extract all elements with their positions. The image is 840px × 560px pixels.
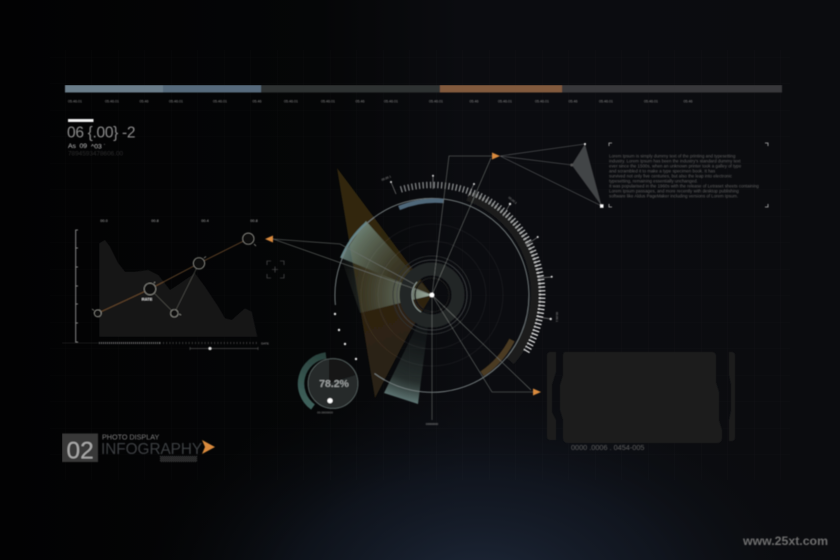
timeline labels: 05.46.01 (284, 100, 298, 104)
arrow: left (265, 236, 273, 242)
secondary line (150, 263, 199, 313)
panel copy: industry. Lorem Ipsum has been the industry's standard dummy text (609, 158, 741, 164)
teal arc upper left (341, 223, 366, 258)
timeline labels: 05.46 (356, 100, 364, 104)
column labels: 00.0 (100, 219, 108, 223)
triangle points (570, 143, 604, 208)
timeline labels: 05.46.01 (644, 100, 658, 104)
photo code: 0000 .0006 . 0454-005 (571, 443, 644, 452)
satellite dots (334, 313, 357, 360)
node label: RATE (142, 296, 153, 302)
gauge dot (327, 398, 333, 403)
green wedge upper (341, 221, 432, 295)
photo main (560, 352, 722, 443)
core rings (393, 256, 471, 334)
panel copy: Lorem Ipsum passages, and more recently with desktop publishing (609, 188, 739, 194)
readout block: As (68, 143, 77, 150)
chart axis (76, 230, 78, 342)
panel copy: software like Aldus PageMaker including versions of Lorem Ipsum. (609, 194, 738, 198)
panel copy: typesetting, remaining essentially unchanged. (609, 178, 698, 184)
connector lines (273, 156, 533, 420)
marker labels: 00.00.1 (381, 174, 392, 182)
photo right bracket (729, 352, 735, 441)
timeline labels: 05.46 (568, 100, 578, 104)
triangle fill (572, 144, 602, 206)
timeline bar (65, 85, 782, 92)
gauge disc (308, 359, 358, 408)
column labels (100, 219, 258, 223)
title block (62, 432, 215, 464)
gauge (301, 356, 358, 414)
gauge caption: 00.0000000 (317, 410, 333, 414)
crosshair box (267, 261, 284, 278)
photo left bracket (547, 352, 556, 440)
timeline labels: 05.46.01 (321, 100, 335, 104)
timeline labels: 05.46.01 (68, 100, 82, 104)
timeline labels: 05.46.01 (429, 100, 443, 104)
panel copy: and scrambled it to make a type specimen book. It has (609, 168, 716, 174)
faint rings (361, 224, 503, 366)
radar (273, 156, 559, 426)
readout block: 06 {.00} -2 (67, 124, 135, 142)
timeline labels: 05.46.01 (213, 100, 227, 104)
green wedge lower (384, 295, 432, 404)
center point (430, 292, 434, 298)
timeline labels: 05.46 (140, 100, 148, 104)
brown arc lower right (482, 340, 512, 374)
gauge ring (308, 358, 358, 408)
trend line (98, 239, 248, 313)
timeline labels: 05.46.01 (384, 100, 398, 104)
readout block (67, 119, 135, 158)
marker labels: 00.00.1 (507, 196, 518, 205)
timeline labels: 05.46.01 (599, 100, 613, 104)
area series (99, 240, 257, 337)
dither strip (160, 456, 197, 462)
panel copy: Lorem Ipsum is simply dummy text of the printing and typesetting (609, 154, 736, 158)
arrow: upper right (492, 152, 500, 160)
timeline labels: 05.46.01 (535, 100, 549, 104)
marker labels: 00000000 (426, 422, 439, 426)
number box (62, 434, 98, 462)
line chart panel (62, 219, 269, 350)
data nodes (92, 233, 256, 317)
triangle node (500, 143, 604, 208)
timeline labels: 05.46.01 (169, 100, 183, 104)
title arrow (202, 440, 215, 454)
green wedge left (341, 258, 432, 313)
subtitle: PHOTO DISPLAY (102, 432, 159, 442)
column labels: 00.8 (250, 219, 258, 223)
panel corners (609, 143, 768, 207)
brown sector (337, 168, 432, 398)
panel copy (609, 154, 759, 198)
watermark: www.25xt.com (742, 534, 828, 548)
panel copy: It was popularised in the 1960s with the release of Letraset sheets containing (609, 184, 759, 188)
readout block: ^03 ˙ (91, 142, 106, 150)
photo display frame (547, 352, 735, 443)
gauge value: 78.2% (319, 378, 350, 390)
marker labels (381, 174, 559, 426)
slider (190, 347, 258, 350)
timeline labels: 05.46 (684, 100, 692, 104)
timeline labels: 05.46 (470, 100, 478, 104)
gauge teal arc (301, 356, 326, 407)
readout block: 09 (80, 143, 87, 150)
panel copy: ever since the 1500s, when an unknown printer took a galley of type (609, 164, 742, 168)
gauge dark sector (329, 359, 356, 384)
main ring (335, 198, 529, 392)
timeline labels: 05.46.01 (498, 100, 512, 104)
title: INFOGRAPHY (101, 441, 202, 458)
radial markers (390, 175, 553, 320)
column labels: 00.4 (201, 219, 209, 223)
panel copy: survived not only five centuries, but also the leap into electronic (609, 174, 733, 178)
readout block: 7894593478606.00 (68, 150, 124, 158)
number: 02 (66, 438, 94, 464)
tick ring (401, 185, 542, 352)
timeline labels: 05.46 (252, 100, 262, 104)
dark outer band (468, 196, 536, 361)
triangle connector lines (500, 144, 602, 206)
arrow: lower right (533, 388, 541, 396)
blue arc (399, 201, 444, 208)
text panel (609, 143, 768, 207)
column labels: 00.8 (151, 219, 159, 223)
marker labels: 00.00.1 (555, 312, 559, 322)
dotted scale: DATE (261, 342, 269, 346)
timeline labels: 05.46.01 (105, 100, 119, 104)
timeline labels (68, 100, 692, 104)
